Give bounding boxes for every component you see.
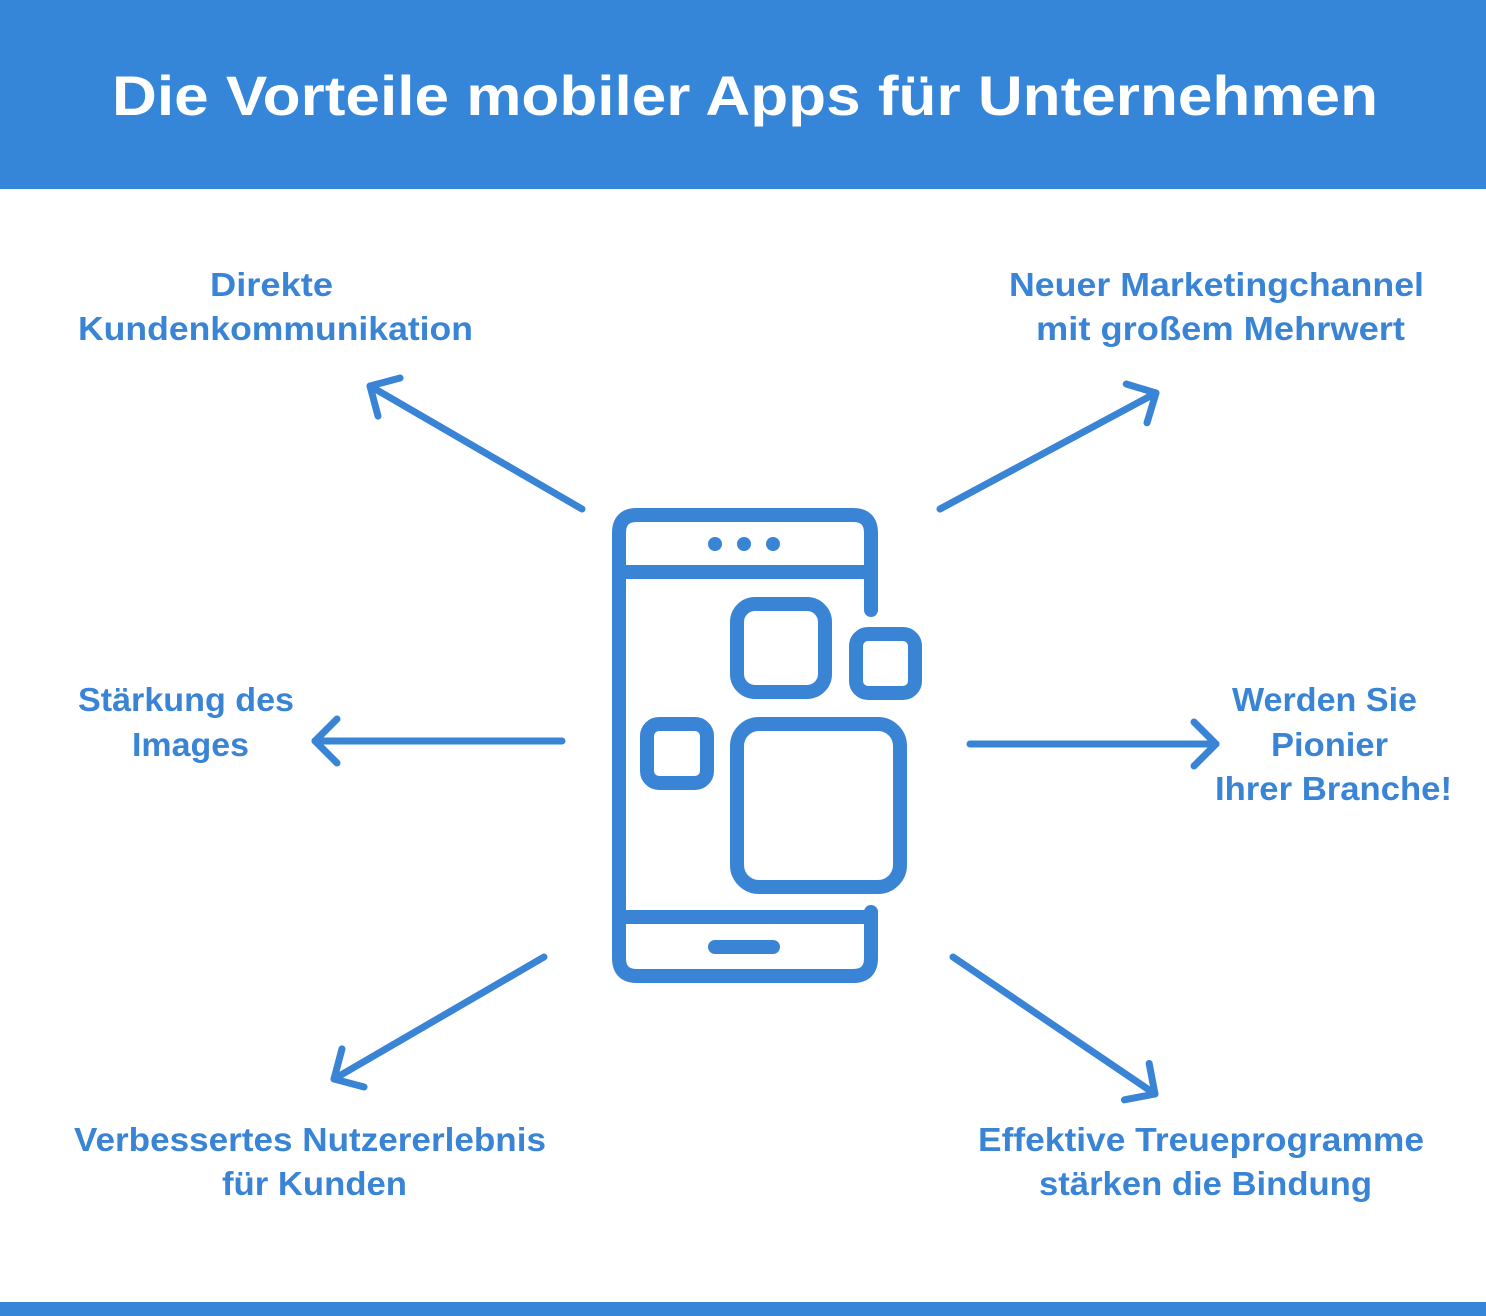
text: Werden Sie Pionier: Pionier bbox=[1271, 726, 1388, 763]
bottom bar bbox=[0, 1302, 1486, 1316]
text: Neuer Marketingchannel: mit großem Mehrwert bbox=[1036, 310, 1405, 347]
text: Werden Sie Pionier: Ihrer Branche! bbox=[1215, 770, 1452, 807]
text: Verbessertes Nutzererlebnis: für Kunden bbox=[222, 1165, 407, 1202]
text: Effektive Treueprogramme: stärken die Bindung bbox=[1039, 1165, 1372, 1202]
text: Neuer Marketingchannel bbox=[1009, 266, 1424, 347]
header banner bbox=[0, 0, 1486, 189]
text: Stärkung des Images: Stärkung des bbox=[78, 681, 294, 718]
text: Verbessertes Nutzererlebnis: Verbessertes Nutzererlebnis bbox=[74, 1121, 546, 1158]
text: Verbessertes Nutzererlebnis bbox=[74, 1121, 546, 1202]
title: Die Vorteile mobiler Apps für Unternehmen bbox=[112, 64, 1378, 127]
text: Direkte Kundenkommunikation: Kundenkommunikation bbox=[78, 310, 473, 347]
text: Stärkung des Images: Images bbox=[132, 726, 249, 763]
text: Werden Sie Pionier bbox=[1215, 681, 1452, 807]
text: Direkte Kundenkommunikation bbox=[78, 266, 473, 347]
arrows bbox=[315, 386, 1216, 1094]
text: Stärkung des Images bbox=[78, 681, 294, 763]
text: Neuer Marketingchannel: Neuer Marketingchannel bbox=[1009, 266, 1424, 303]
text: Effektive Treueprogramme bbox=[978, 1121, 1424, 1202]
text: Werden Sie Pionier: Werden Sie bbox=[1232, 681, 1417, 718]
text: Direkte Kundenkommunikation: Direkte bbox=[210, 266, 333, 303]
text: Effektive Treueprogramme: Effektive Treueprogramme bbox=[978, 1121, 1424, 1158]
icon: phone with app tiles bbox=[619, 515, 915, 976]
